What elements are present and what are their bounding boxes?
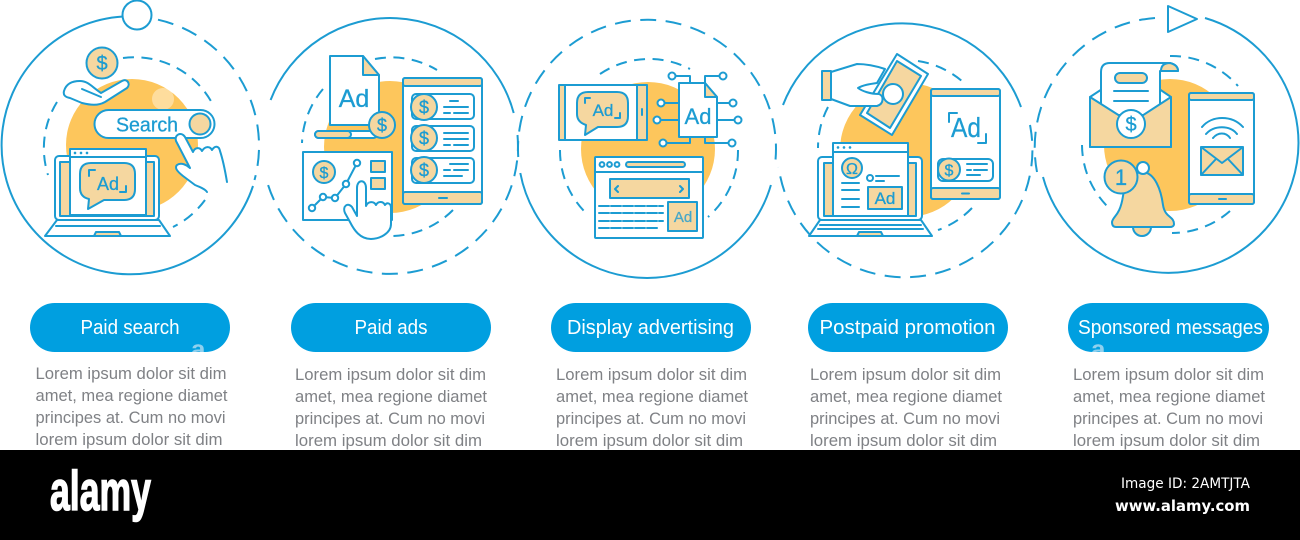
icon: tablet with price list: $: [419, 160, 429, 180]
outer ring: [783, 23, 1021, 107]
body text: postpaid promotion: principes at. Cum no movi: [810, 410, 1000, 428]
alamy logo: alamy: [50, 459, 151, 522]
panel: display advertising: [518, 20, 776, 450]
icon: hand giving banknote: [822, 54, 928, 135]
icon: notification bell: 1: [1115, 165, 1127, 190]
pill heading: paid ads: Paid ads: [354, 317, 428, 339]
inner dashed ring: [302, 57, 453, 236]
icon: laptop with ad: Ad: [97, 174, 119, 194]
footer bar: [0, 450, 1300, 540]
icon: laptop with profile page: [809, 143, 932, 236]
icon: dollar coin over hand: $: [96, 53, 108, 75]
pill heading: paid search: Paid search: [80, 317, 180, 339]
body text: postpaid promotion: [810, 366, 1002, 450]
body text: sponsored messages: Lorem ipsum dolor sit dim: [1073, 366, 1264, 384]
inner dashed ring: [44, 57, 212, 227]
icon: ad circuit document: [654, 72, 742, 146]
body text: paid ads: lorem ipsum dolor sit dim: [295, 432, 482, 450]
outer ring: [520, 173, 771, 278]
pill heading: sponsored messages: Sponsored messages: [1078, 317, 1263, 339]
body text: paid search: [36, 365, 228, 449]
pill heading: paid search: [30, 303, 230, 352]
icon: landscape tablet with ad bubble: Ad: [593, 101, 613, 120]
icon: phone with wifi mail: [1189, 93, 1254, 204]
icon: browser window with banner: [595, 157, 703, 238]
icon: envelope with invoice and coin: [1090, 63, 1178, 147]
outer dashed arc: [518, 20, 776, 160]
body text: paid search: lorem ipsum dolor sit dim: [36, 431, 222, 449]
panel: postpaid promotion: [779, 23, 1032, 450]
icon: browser window with banner: Ad: [674, 209, 692, 226]
image id: Image ID: 2AMTJTA: [1121, 476, 1250, 492]
outer ring: [2, 16, 253, 274]
yellow backdrop circle: [324, 81, 456, 213]
outer ring: [1043, 18, 1298, 273]
pill heading: paid search: a: [191, 334, 206, 364]
pill heading: display advertising: Display advertising: [567, 317, 734, 339]
body text: display advertising: lorem ipsum dolor sit dim: [556, 432, 743, 450]
outer dashed arc: [158, 20, 259, 180]
play marker triangle: [1168, 6, 1197, 32]
outer dashed arc: [1035, 18, 1155, 172]
icon: ad document with coin: Ad: [339, 85, 369, 113]
body text: postpaid promotion: amet, mea regione diamet: [810, 388, 1002, 406]
watermark smudge: [152, 88, 174, 110]
body text: sponsored messages: principes at. Cum no movi: [1073, 410, 1263, 428]
yellow backdrop circle: [1104, 79, 1236, 211]
icon: tablet with price list: $: [419, 98, 429, 118]
icon: pointing hand: [176, 134, 227, 192]
inner dashed ring: [560, 59, 738, 217]
outer dashed arc: [779, 125, 1032, 277]
yellow backdrop circle: [66, 79, 198, 211]
body text: sponsored messages: lorem ipsum dolor sit dim: [1073, 432, 1260, 450]
icon: tablet with price list: [403, 78, 482, 204]
icon: chart with hand: [303, 152, 392, 239]
body text: display advertising: Lorem ipsum dolor sit dim: [556, 366, 747, 384]
icon: laptop with ad: [45, 149, 170, 236]
pill heading: postpaid promotion: Postpaid promotion: [820, 317, 996, 339]
icon: search bar: Search: [116, 114, 178, 136]
icon: ad document with coin: $: [377, 116, 387, 136]
body text: paid ads: Lorem ipsum dolor sit dim: [295, 366, 486, 384]
icon: phone with ad: Ad: [951, 112, 981, 143]
icon: laptop with profile page: Ad: [875, 189, 895, 208]
body text: postpaid promotion: Lorem ipsum dolor sit dim: [810, 366, 1001, 384]
panel: sponsored messages: [1035, 6, 1298, 450]
body text: sponsored messages: amet, mea regione diamet: [1073, 388, 1265, 406]
body text: display advertising: [556, 366, 748, 450]
pill heading: postpaid promotion: [808, 303, 1008, 352]
icon: notification bell: [1104, 160, 1174, 236]
icon: envelope with invoice and coin: $: [1125, 114, 1137, 136]
icon: ad document with coin: [315, 56, 395, 138]
pill heading: paid ads: [291, 303, 491, 352]
icon: laptop with profile page: Ω: [846, 161, 858, 178]
body text: paid ads: [295, 366, 487, 450]
body text: paid search: Lorem ipsum dolor sit dim: [36, 365, 226, 383]
panel: paid ads: [267, 18, 518, 450]
body text: paid ads: principes at. Cum no movi: [295, 410, 485, 428]
progress marker circle: [122, 0, 152, 30]
yellow backdrop circle: [581, 82, 715, 216]
body text: paid ads: amet, mea regione diamet: [295, 388, 487, 406]
body text: sponsored messages: [1073, 366, 1265, 450]
body text: paid search: amet, mea regione diamet: [36, 387, 228, 405]
icon: ad circuit document: Ad: [685, 104, 711, 129]
pill heading: display advertising: [551, 303, 751, 352]
outer ring: [271, 18, 514, 113]
icon: search bar: [94, 110, 214, 138]
outer dashed arc: [267, 135, 518, 274]
website: www.alamy.com: [1115, 497, 1250, 515]
panel: paid search: [2, 0, 259, 449]
yellow backdrop circle: [840, 83, 974, 217]
body text: postpaid promotion: lorem ipsum dolor sit dim: [810, 432, 997, 450]
inner dashed ring: [818, 61, 972, 230]
inner dashed ring: [1082, 56, 1238, 233]
icon: tablet with price list: $: [419, 128, 429, 148]
body text: display advertising: principes at. Cum no movi: [556, 410, 746, 428]
icon: landscape tablet with ad bubble: [559, 85, 647, 140]
pill heading: sponsored messages: [1068, 303, 1269, 352]
icon: phone with ad: $: [945, 162, 954, 180]
body text: paid search: principes at. Cum no movi: [36, 409, 226, 427]
body text: display advertising: amet, mea regione diamet: [556, 388, 748, 406]
pill heading: sponsored messages: a: [1091, 334, 1106, 364]
icon: chart with hand: $: [320, 165, 329, 182]
icon: dollar coin over hand: [64, 48, 129, 105]
icon: phone with ad: [931, 89, 1000, 199]
